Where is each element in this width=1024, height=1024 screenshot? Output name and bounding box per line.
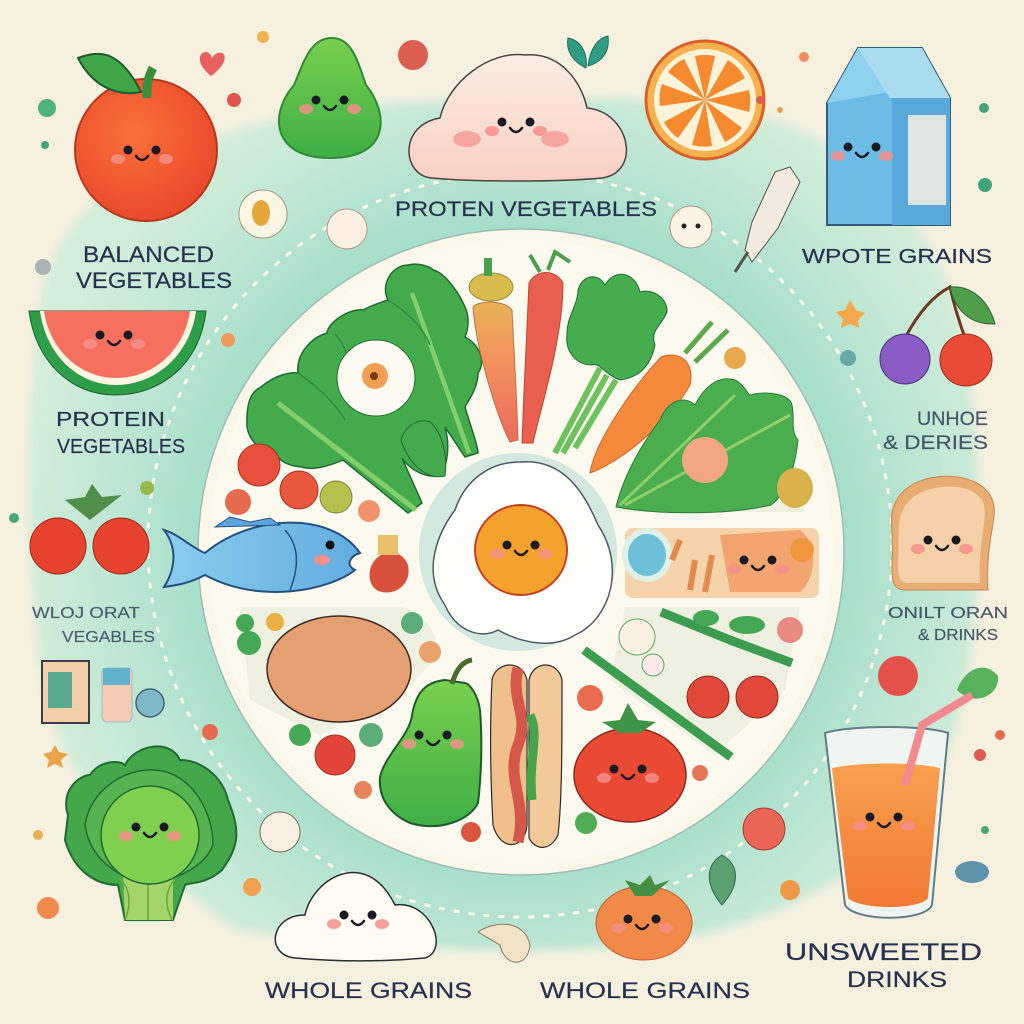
plate: small condiment — [370, 535, 409, 593]
icon: cloud bottom — [275, 873, 436, 961]
label: protein vegetables top: PROTEN VEGETABLES — [395, 198, 657, 221]
icon: bottom shell — [478, 924, 530, 962]
label: onut organ and drinks — [888, 605, 1008, 644]
label: whole grains right: WHOLE GRAINS — [540, 978, 750, 1003]
icon: toast — [891, 476, 994, 590]
plate: right bento — [625, 528, 819, 598]
plate: potato — [236, 612, 441, 722]
icon: small red berry — [398, 40, 428, 70]
icon: cloud top — [409, 54, 626, 181]
icon: small smiling ball right — [670, 206, 712, 248]
icon: bottom tomato — [596, 875, 692, 960]
teal background blob — [29, 97, 979, 950]
label: unsweeted drinks: DRINKS — [847, 967, 947, 992]
label: unhoe and deries — [883, 409, 988, 454]
plate: egg on greens — [337, 340, 415, 416]
plate: leafy greens — [247, 264, 482, 513]
icon: leaf bottom — [709, 855, 736, 905]
label: whoj orat vegables — [32, 605, 155, 646]
icon: milk carton — [827, 48, 950, 225]
icon: star right — [836, 300, 865, 328]
label: balanced vegetables — [76, 242, 232, 293]
label: balanced vegetables: BALANCED — [83, 242, 214, 267]
icon: cherries — [880, 287, 995, 386]
icon: small ball left — [260, 812, 300, 852]
label: unhoe and deries: UNHOE — [917, 409, 988, 430]
icon: red berry right — [878, 656, 918, 696]
plate: fish — [164, 517, 360, 592]
label: unhoe and deries: & DERIES — [883, 433, 988, 454]
icon: box and bottle — [42, 661, 164, 723]
plate: arugula — [616, 379, 813, 513]
label: protein vegetables left — [56, 409, 185, 458]
plate: bottom tomato — [574, 703, 686, 822]
label: unsweeted drinks — [785, 939, 982, 992]
plate: fried egg — [433, 462, 612, 643]
label: whole grains left: WHOLE GRAINS — [265, 978, 472, 1003]
icon: watermelon — [29, 311, 206, 395]
plate: carrots — [469, 252, 570, 443]
icon: star left — [43, 745, 68, 768]
plate: green beans and tomatoes — [575, 610, 803, 834]
plate: carrot right — [590, 322, 746, 473]
label: whoj orat vegables: WLOJ ORAT — [32, 605, 140, 622]
label: onut organ and drinks: ONILT ORAN — [888, 605, 1008, 622]
label: protein vegetables left: VEGETABLES — [57, 436, 185, 458]
icon: small sushi — [239, 190, 287, 238]
plate: spinach bunch — [555, 274, 667, 453]
plate: left tomatoes — [225, 444, 380, 522]
icon: small red ball — [743, 808, 785, 850]
plate: small tomato left — [289, 723, 481, 842]
plate: pear — [380, 660, 481, 826]
label: whote grains: WPOTE GRAINS — [802, 246, 992, 268]
icon: orange top left — [75, 54, 217, 221]
icon: skewer — [735, 167, 800, 272]
icon: avocado — [279, 38, 381, 158]
icon: leaf top — [568, 36, 608, 68]
icon: broccoli — [65, 746, 236, 920]
label: whoj orat vegables: VEGABLES — [62, 629, 155, 646]
icon: twin tomatoes — [30, 484, 149, 574]
icon: heart — [200, 52, 225, 76]
plate — [198, 229, 844, 875]
label: balanced vegetables: VEGETABLES — [76, 268, 232, 293]
plate: hot dog — [491, 665, 562, 847]
icon: juice glass — [825, 668, 998, 918]
icon: small smiling ball — [327, 209, 367, 249]
label: unsweeted drinks: UNSWEETED — [785, 939, 982, 966]
dashed orbit ring — [148, 173, 892, 917]
label: onut organ and drinks: & DRINKS — [918, 627, 998, 644]
icon: blue capsule — [955, 861, 989, 883]
label: protein vegetables left: PROTEIN — [56, 409, 165, 431]
icon: orange slice — [646, 41, 764, 159]
